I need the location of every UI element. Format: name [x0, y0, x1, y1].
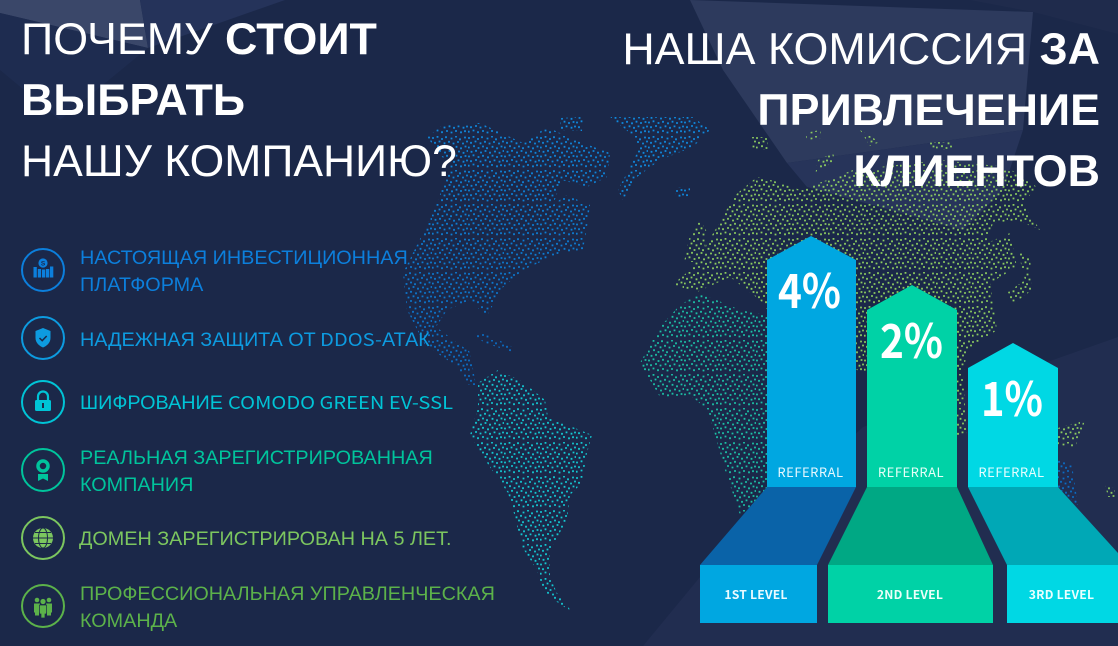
- map: Arctic archipelago: [752, 137, 768, 150]
- chart: level 1 column: [700, 236, 856, 623]
- map: North America: [403, 123, 610, 385]
- text: НАСТОЯЩАЯ ИНВЕСТИЦИОННАЯ: [80, 247, 408, 269]
- icon: coin and bars: S: [41, 260, 46, 267]
- map: Australia: [1058, 458, 1078, 505]
- arrow bar 2%: [867, 285, 957, 487]
- text: КОМАНДА: [80, 610, 178, 632]
- referral label: REFERRAL: [978, 462, 1045, 481]
- icon: coin and bars: [22, 249, 64, 291]
- level label: 1ST LEVEL: [724, 585, 788, 603]
- icon: shield: [22, 317, 64, 359]
- map: Arctic islands: [560, 117, 583, 131]
- text: COMODO GREEN EV-SSL: [228, 389, 453, 415]
- title: right heading: НАША КОМИССИЯ ЗА: [622, 24, 1100, 74]
- base plate: [1007, 565, 1118, 623]
- map: Japan: [1008, 252, 1032, 305]
- level label: 3RD LEVEL: [1029, 585, 1094, 603]
- perspective floor: [828, 487, 993, 565]
- icon: globe: [22, 517, 64, 559]
- text: КОМПАНИЯ: [80, 474, 193, 496]
- list item: investment platform: [22, 247, 408, 296]
- title: right heading: КЛИЕНТОВ: [853, 146, 1100, 196]
- map: Eurasia: [672, 160, 1040, 440]
- perspective floor: [700, 487, 856, 565]
- text: DDOS-: [320, 326, 382, 352]
- title: left heading: НАШУ КОМПАНИЮ?: [21, 137, 457, 186]
- list item: management team: [22, 583, 495, 632]
- icon: people: [22, 585, 64, 627]
- referral label: REFERRAL: [878, 462, 944, 481]
- text: НАДЕЖНАЯ ЗАЩИТА ОТ: [80, 329, 316, 351]
- map: South America: [470, 370, 592, 612]
- chart: level 2 column: [828, 285, 993, 623]
- text: ДОМЕН ЗАРЕГИСТРИРОВАН НА 5 ЛЕТ.: [79, 528, 452, 550]
- text: ШИФРОВАНИЕ: [80, 392, 223, 414]
- text: ПРОФЕССИОНАЛЬНАЯ УПРАВЛЕНЧЕСКАЯ: [80, 583, 495, 605]
- title: left heading: ВЫБРАТЬ: [21, 75, 245, 125]
- icon: padlock: [22, 381, 64, 423]
- perspective floor: [968, 487, 1118, 565]
- map: British Isles: [684, 222, 706, 262]
- list item: registered company: [22, 447, 433, 496]
- map: Iceland: [675, 188, 690, 197]
- map: Caribbean: [477, 334, 512, 352]
- arrow bar 1%: [968, 343, 1058, 487]
- base plate: [828, 565, 993, 623]
- text: ПЛАТФОРМА: [80, 274, 204, 296]
- value 4%: 4%: [778, 253, 841, 322]
- title: right heading: ПРИВЛЕЧЕНИЕ: [757, 85, 1100, 135]
- chart: level 3 column: [968, 343, 1118, 623]
- map: Africa: [640, 294, 767, 514]
- icon: award badge: [22, 449, 64, 491]
- title: left heading: ПОЧЕМУ СТОИТ: [21, 14, 377, 64]
- text: АТАК: [382, 329, 430, 351]
- list item: SSL encryption: [22, 381, 453, 423]
- dotted world map: [403, 117, 1115, 612]
- title: left heading: [21, 14, 457, 186]
- list item: DDoS protection: [22, 317, 430, 359]
- text: РЕАЛЬНАЯ ЗАРЕГИСТРИРОВАННАЯ: [80, 447, 433, 469]
- value 2%: 2%: [880, 303, 943, 372]
- level label: 2ND LEVEL: [877, 585, 943, 603]
- title: right heading: [622, 24, 1100, 196]
- map: Indonesia: [1058, 422, 1084, 446]
- referral label: REFERRAL: [777, 462, 844, 481]
- base plate: [700, 565, 817, 623]
- value 1%: 1%: [981, 361, 1043, 430]
- map: Greenland: [610, 117, 710, 200]
- list item: domain: [22, 517, 452, 559]
- arrow bar 4%: [767, 236, 856, 487]
